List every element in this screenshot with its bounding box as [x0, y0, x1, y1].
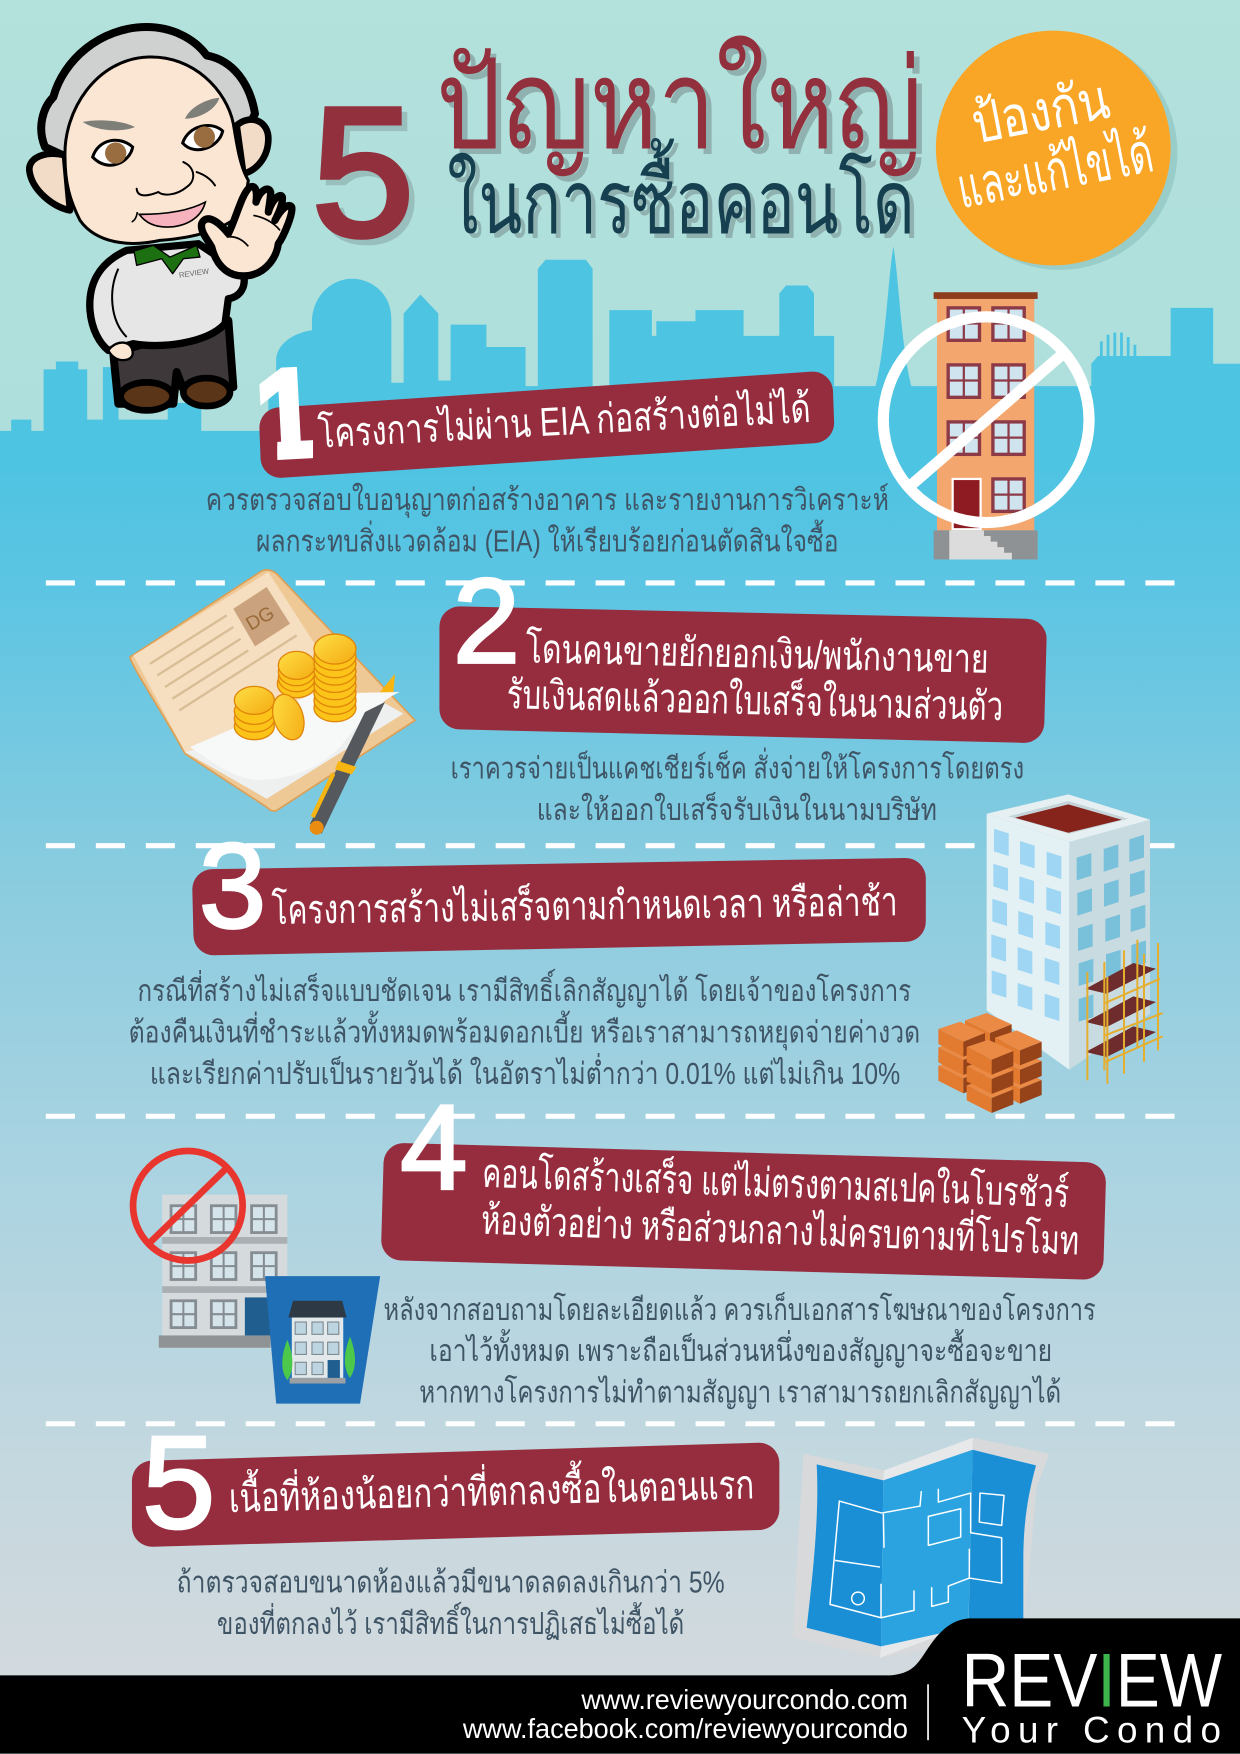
section 4	[133, 1080, 1096, 1410]
title number 5: 5	[312, 69, 414, 274]
ribbon 3	[212, 878, 906, 935]
body 3: ต้องคืนเงินที่ชำระแล้วทั้งหมดพร้อมดอกเบี้ย หรือเราสามารถหยุดจ่ายค่างวด	[129, 1010, 920, 1051]
scaffold	[1086, 940, 1163, 1084]
body 3: และเรียกค่าปรับเป็นรายวันได้ ในอัตราไม่ต่ำกว่า 0.01% แต่ไม่เกิน 10%	[150, 1053, 900, 1091]
body 5: ของที่ตกลงไว้ เรามีสิทธิ์ในการปฏิเสธไม่ซื้อได้	[217, 1601, 684, 1641]
icon: orange building with no sign	[883, 292, 1089, 559]
section 5	[142, 1409, 1049, 1658]
ribbon 2	[460, 627, 1026, 723]
divider	[46, 843, 1176, 848]
ribbon 5	[152, 1463, 759, 1527]
body 4: หากทางโครงการไม่ทำตามสัญญา เราสามารถยกเลิกสัญญาได้	[419, 1375, 1061, 1410]
website links: www.reviewyourcondo.com	[580, 1684, 908, 1715]
website links: www.facebook.com/reviewyourcondo	[462, 1713, 908, 1744]
city skyline	[0, 246, 1240, 470]
divider	[46, 1114, 1176, 1119]
divider	[46, 1422, 1176, 1426]
icon: book with coins and pen: DG	[243, 603, 278, 635]
shirt logo: REVIEW	[178, 266, 210, 280]
body 3: กรณีที่สร้างไม่เสร็จแบบชัดเจน เรามีสิทธิ์เลิกสัญญาได้ โดยเจ้าของโครงการ	[138, 968, 911, 1008]
icon: bricks	[938, 1013, 1042, 1113]
collar	[134, 245, 200, 274]
body 2: และให้ออกใบเสร็จรับเงินในนามบริษัท	[537, 791, 937, 827]
ribbon 1	[280, 392, 814, 458]
ribbon 4	[401, 1163, 1086, 1259]
number 2: 2	[453, 553, 520, 688]
number 5: 5	[142, 1409, 215, 1556]
body 1	[206, 482, 889, 559]
heading 2: โดนคนขายยักยอกเงิน/พนักงานขาย	[525, 625, 989, 682]
legs	[113, 320, 233, 404]
logo: REVIEW	[962, 1639, 1222, 1724]
nose and mouth	[132, 162, 215, 227]
heading 1: โครงการไม่ผ่าน EIA ก่อสร้างต่อไม่ได้	[317, 385, 812, 457]
number 4: 4	[400, 1080, 467, 1215]
body 4: เอาไว้ทั้งหมด เพราะถือเป็นส่วนหนึ่งของสัญญาจะซื้อจะขาย	[429, 1329, 1052, 1368]
body 5	[177, 1567, 725, 1641]
icon: book with coins and pen	[130, 570, 415, 835]
footer bar	[0, 1618, 1240, 1754]
face	[65, 57, 248, 243]
body 1: ผลกระทบสิ่งแวดล้อม (EIA) ให้เรียบร้อยก่อนตัดสินใจซื้อ	[256, 520, 839, 559]
logo: Your Condo	[962, 1709, 1221, 1750]
hair	[41, 27, 255, 157]
section 3	[129, 794, 1163, 1113]
divider	[46, 581, 1176, 585]
icon: blue floor plan map	[793, 1438, 1049, 1658]
body 2: เราควรจ่ายเป็นแคชเชียร์เช็ค สั่งจ่ายให้โครงการโดยตรง	[451, 748, 1024, 786]
heading 2: รับเงินสดแล้วออกใบเสร็จในนามส่วนตัว	[506, 670, 1004, 729]
ears	[29, 120, 268, 210]
number 1: 1	[250, 344, 324, 483]
heading 4	[480, 1149, 1080, 1264]
mascot character	[29, 27, 292, 410]
icon: building under construction	[987, 794, 1163, 1084]
heading 3: โครงการสร้างไม่เสร็จตามกำหนดเวลา หรือล่าช้า	[271, 877, 898, 933]
heading 2	[506, 625, 1004, 729]
body 3	[129, 968, 920, 1091]
title	[312, 35, 928, 280]
heading 5: เนื้อที่ห้องน้อยกว่าที่ตกลงซื้อในตอนแรก	[228, 1455, 755, 1521]
footer	[0, 1618, 1240, 1754]
title number 5: 5	[318, 75, 420, 280]
body 4	[384, 1291, 1096, 1410]
body 5: ถ้าตรวจสอบขนาดห้องแล้วมีขนาดลดลงเกินกว่า 5%	[177, 1567, 725, 1600]
eyes	[93, 125, 223, 165]
number 3: 3	[199, 818, 266, 953]
shirt	[90, 244, 244, 350]
title line 1: ปัญหาใหญ่	[436, 35, 922, 177]
icon: blue brochure	[265, 1276, 380, 1404]
raised hand	[201, 187, 292, 276]
body 2	[451, 748, 1024, 827]
shoes	[121, 378, 230, 410]
orange badge: ป้องกัน	[966, 67, 1115, 155]
title line 2	[447, 138, 919, 256]
eyebrows	[83, 98, 219, 130]
orange badge	[936, 31, 1177, 270]
title line 2: ในการซื้อคอนโด	[447, 138, 915, 252]
title line 2: ในการซื้อคอนโด	[452, 142, 919, 256]
section 1	[206, 292, 1089, 559]
left hand	[108, 343, 133, 360]
body 1: ควรตรวจสอบใบอนุญาตก่อสร้างอาคาร และรายงานการวิเคราะห์	[206, 482, 889, 519]
section 2	[130, 553, 1026, 835]
website links	[462, 1684, 908, 1744]
title line 1: ปัญหาใหญ่	[442, 41, 928, 183]
icon: grey building with red no sign	[133, 1151, 287, 1348]
coins	[234, 634, 356, 744]
